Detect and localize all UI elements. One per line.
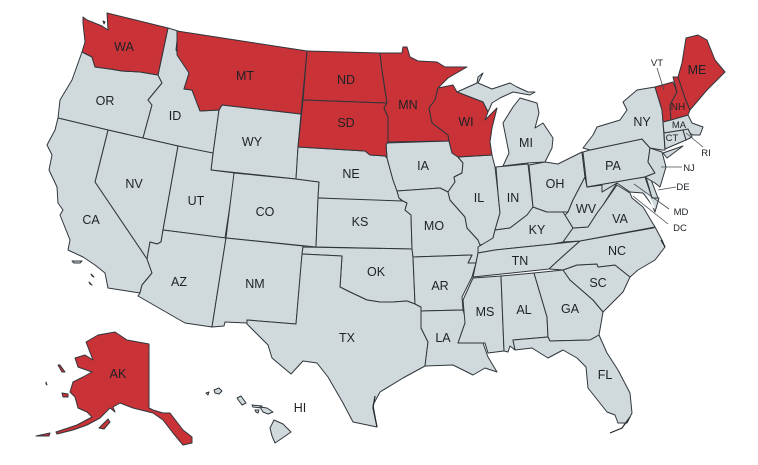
state labels: MN (398, 98, 418, 112)
state labels: NV (125, 177, 143, 191)
state labels: HI (294, 401, 306, 415)
state labels: SC (589, 276, 607, 290)
small state labels: RI (701, 148, 711, 159)
small state labels: MD (674, 207, 689, 218)
state labels: UT (188, 194, 205, 208)
small state labels: VT (651, 58, 663, 69)
state labels: WA (114, 40, 134, 54)
state labels: AR (431, 279, 449, 293)
state labels: AK (110, 367, 127, 381)
state labels: LA (435, 331, 451, 345)
state labels: AL (516, 303, 532, 317)
state labels: IL (474, 191, 484, 205)
state labels: ID (169, 109, 181, 123)
state labels: MS (476, 305, 494, 319)
Alaska (56, 332, 192, 445)
state labels: MO (424, 219, 444, 233)
state labels: OK (367, 265, 386, 279)
state labels: NM (245, 277, 265, 291)
state labels: NE (342, 167, 360, 181)
state labels: KY (529, 223, 546, 237)
state labels: NC (608, 244, 626, 258)
small state labels: MA (672, 120, 687, 131)
California islands (72, 261, 82, 263)
state labels: NH (671, 102, 685, 113)
small state labels: NJ (683, 163, 695, 174)
state labels: OH (546, 177, 564, 191)
state labels: IA (417, 159, 430, 173)
state labels: PA (605, 159, 622, 173)
state labels: IN (507, 191, 519, 205)
bays and coastal detail (647, 193, 654, 208)
state labels: TX (339, 331, 356, 345)
state labels: WV (576, 202, 597, 216)
Hawaii islands (206, 392, 209, 395)
state labels: VA (612, 212, 629, 226)
state labels: ND (337, 73, 355, 87)
small state labels: DE (676, 182, 690, 193)
state labels: MT (236, 69, 254, 83)
state labels: GA (561, 302, 580, 316)
state labels: OR (96, 94, 114, 108)
small state labels (651, 58, 711, 234)
state labels: ME (688, 63, 706, 77)
grey states (47, 28, 703, 443)
state labels: CA (82, 213, 100, 227)
small state labels: CT (666, 133, 679, 144)
state labels: WI (458, 115, 474, 129)
state labels: KS (352, 215, 368, 229)
state labels: AZ (171, 275, 187, 289)
state labels: CO (256, 205, 275, 219)
state labels (82, 40, 706, 415)
state labels: TN (512, 254, 528, 268)
state labels: WY (242, 135, 263, 149)
small state labels: DC (673, 223, 687, 234)
state labels: FL (598, 368, 612, 382)
state labels: MI (519, 136, 533, 150)
leader lines (633, 68, 703, 224)
state labels: NY (633, 115, 651, 129)
state labels: SD (337, 116, 355, 130)
